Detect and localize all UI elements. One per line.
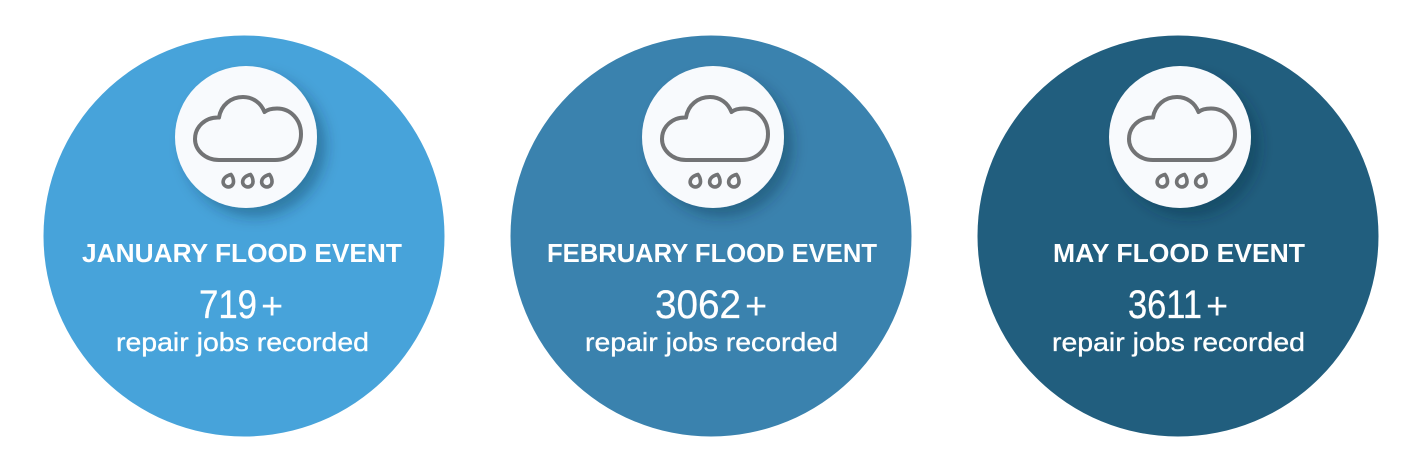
icon: rain cloud — [642, 66, 784, 208]
number: + — [261, 286, 283, 328]
panel: May flood event — [978, 36, 1378, 436]
panel: January flood event — [44, 36, 444, 436]
panel: February flood event — [510, 36, 912, 436]
panel background circle — [510, 36, 912, 436]
panel background circle — [44, 36, 444, 436]
caption: repair jobs recorded — [585, 327, 838, 357]
heading: FEBRUARY FLOOD EVENT — [547, 238, 877, 268]
caption: repair jobs recorded — [116, 327, 369, 357]
number: 3062 — [655, 283, 741, 327]
heading: JANUARY FLOOD EVENT — [82, 238, 402, 268]
number: 719 — [199, 283, 257, 327]
number: + — [1206, 286, 1228, 328]
panel background circle — [978, 36, 1378, 436]
number: + — [745, 286, 767, 328]
icon: rain cloud — [1109, 66, 1251, 208]
heading: MAY FLOOD EVENT — [1053, 238, 1305, 268]
caption: repair jobs recorded — [1052, 327, 1305, 357]
icon: rain cloud — [175, 66, 317, 208]
number: 3611 — [1128, 283, 1202, 327]
